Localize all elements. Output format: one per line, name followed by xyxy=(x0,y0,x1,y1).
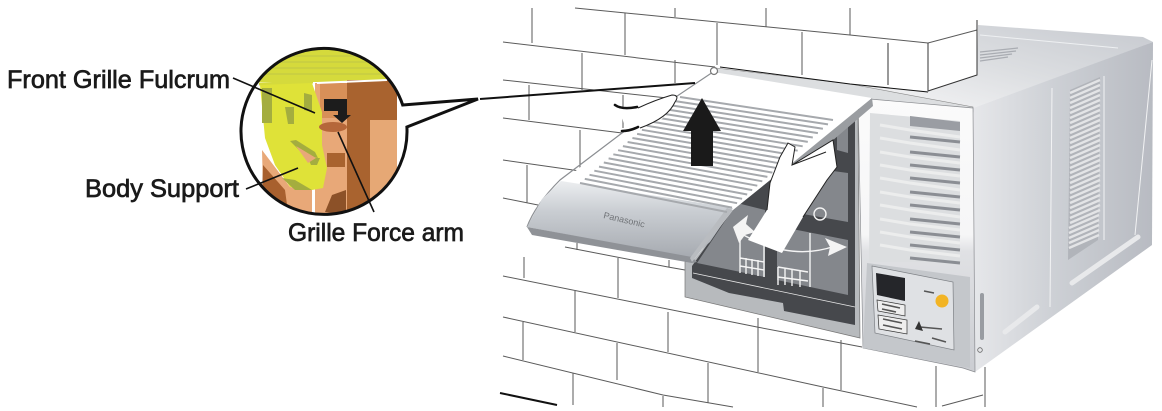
inner frame xyxy=(685,118,860,338)
label: front grille fulcrum: Front Grille Fulcrum xyxy=(7,66,230,94)
panel markings xyxy=(882,291,946,344)
right hand xyxy=(748,140,837,253)
magnifier black arrow xyxy=(324,99,351,123)
front grille lid xyxy=(527,68,873,263)
label: grille force arm: Grille Force arm xyxy=(288,219,464,247)
corner slot xyxy=(980,293,984,340)
leader: front grille fulcrum xyxy=(233,78,315,113)
side handle recesses xyxy=(1005,237,1138,332)
side vent xyxy=(1068,77,1100,260)
filter panels xyxy=(803,167,848,222)
top vent xyxy=(980,48,1018,61)
lid front face xyxy=(527,181,733,258)
display xyxy=(876,273,905,301)
lid stripes xyxy=(580,97,833,212)
power button xyxy=(936,294,948,308)
left hand xyxy=(615,95,678,131)
air conditioner front face xyxy=(858,98,975,372)
front louvers xyxy=(869,113,960,263)
white direction arrows xyxy=(733,215,755,243)
front rail xyxy=(716,68,973,112)
leader: body support xyxy=(246,168,298,189)
control panel surround xyxy=(863,263,970,368)
brand name: Panasonic xyxy=(603,210,646,230)
brick wall xyxy=(500,8,985,407)
up arrow xyxy=(683,98,721,166)
control panel xyxy=(872,266,954,350)
magnifier image xyxy=(258,50,397,213)
hinge xyxy=(710,68,718,74)
air conditioner top surface xyxy=(850,25,1153,108)
label: body support: Body Support xyxy=(85,175,239,203)
leader to grille xyxy=(480,83,695,99)
magnifier callout outline xyxy=(241,48,478,214)
air conditioner side panel xyxy=(973,42,1153,372)
leader: grille force arm xyxy=(338,132,374,212)
filter frames xyxy=(740,208,835,287)
button labels xyxy=(877,300,905,316)
